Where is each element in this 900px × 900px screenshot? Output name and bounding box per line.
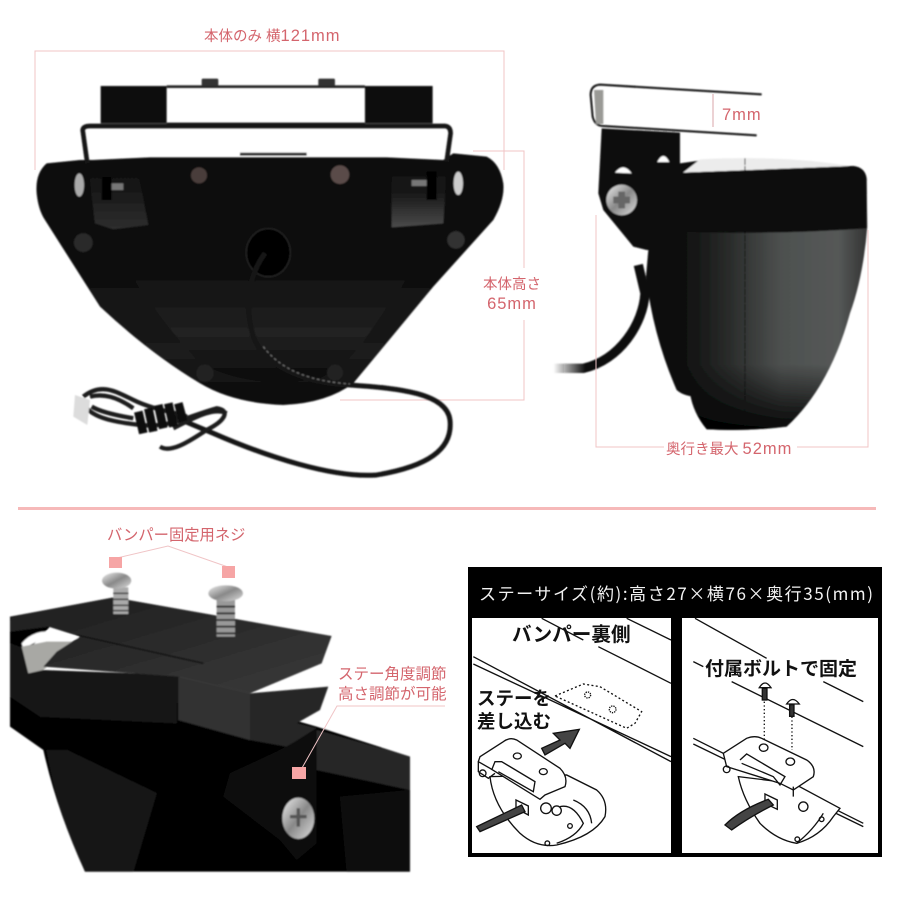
dimension: stay gap 7mm: 7mm <box>722 106 762 124</box>
panel: installation diagram <box>468 567 882 857</box>
dimension: body height: 本体高さ <box>483 276 541 293</box>
dimension: body width <box>35 27 504 170</box>
upper stay plates <box>101 79 433 126</box>
callout: stay adjust: ステー角度調節 <box>338 665 447 683</box>
grommet <box>246 229 290 277</box>
lamp outline <box>738 777 840 843</box>
panel: side view dimensions <box>553 85 868 458</box>
bracket arm <box>598 128 703 250</box>
lamp outline <box>490 775 606 846</box>
diagram label: bumper rear: バンパー裏側 <box>512 624 631 646</box>
bolts <box>764 702 792 750</box>
lamp body <box>36 153 503 405</box>
hinge plates <box>88 165 148 229</box>
lamp back <box>10 617 410 872</box>
lower plate <box>178 677 328 747</box>
callout: bumper screws <box>107 527 245 578</box>
callout: stay adjust: 高さ調節が可能 <box>338 685 447 703</box>
top plate <box>10 597 332 693</box>
cable <box>73 253 450 475</box>
frame and header <box>468 567 882 857</box>
white gap <box>22 631 83 648</box>
side bolts <box>75 173 84 197</box>
divider <box>18 507 876 510</box>
dimension: body height: 65mm <box>487 295 537 313</box>
side arm <box>223 730 317 860</box>
diagram: insert stay <box>472 618 671 853</box>
bolt <box>603 181 640 219</box>
rear housing <box>646 247 720 397</box>
diagram: fix with bolts <box>682 618 878 853</box>
clip strip <box>591 85 762 135</box>
callout: bumper screws: バンパー固定用ネジ <box>107 527 245 544</box>
arrow <box>542 729 579 755</box>
cable socket <box>516 800 528 815</box>
screws <box>102 573 243 637</box>
cable <box>553 265 645 368</box>
photo: stay bracket <box>10 573 410 872</box>
lamp rear cover <box>113 160 425 382</box>
dimension: body height <box>340 151 541 400</box>
photo: side of lamp <box>553 85 867 430</box>
stay <box>723 737 814 790</box>
dimension: depth 52mm: 奥行き最大 52mm <box>666 440 792 458</box>
dimension: stay gap 7mm <box>713 94 762 127</box>
dimension: body width: 本体のみ 横121mm <box>204 27 341 45</box>
stay <box>478 739 566 799</box>
main housing <box>675 158 867 430</box>
diagram label: insert stay: ステーを <box>477 688 551 709</box>
photo: front of lamp with cable <box>36 79 503 475</box>
panel: front view dimensions <box>35 27 541 475</box>
lower stay bracket <box>83 126 451 163</box>
screws <box>191 167 207 183</box>
panel: stay close-up photo <box>10 527 447 872</box>
diagram label: push in: 差し込む <box>477 711 551 732</box>
diagram label: fix with supplied bolts: 付属ボルトで固定 <box>705 658 857 680</box>
side bolt <box>282 798 314 839</box>
header text: ステーサイズ(約):高さ27×横76×奥行35(mm) <box>479 580 873 605</box>
callout: stay adjust <box>292 665 447 779</box>
dimension: depth 52mm <box>596 215 868 458</box>
silver reflection <box>22 642 100 673</box>
